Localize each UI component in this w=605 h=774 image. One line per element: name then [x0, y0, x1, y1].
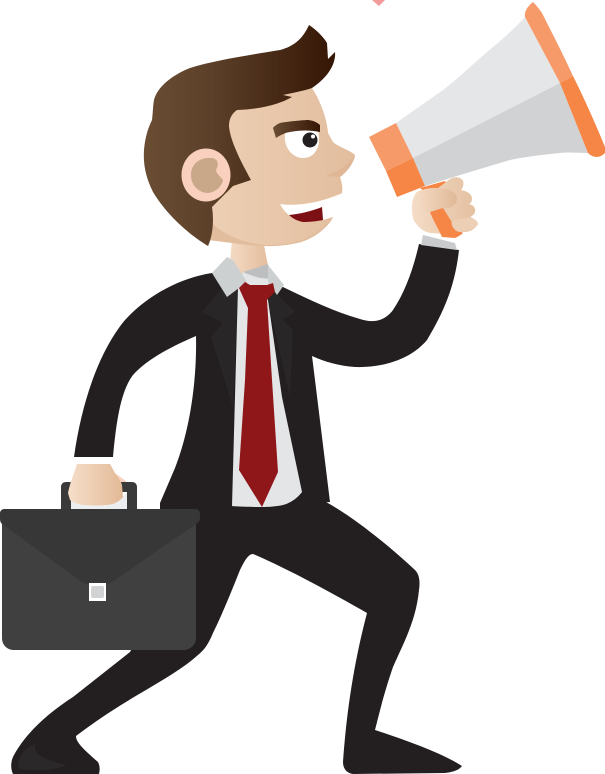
left lapel: [202, 288, 238, 407]
hair: [144, 25, 335, 246]
pupil: [302, 132, 318, 148]
tongue: [289, 207, 323, 222]
rim lower: [560, 76, 605, 157]
jacket: [74, 244, 459, 512]
back ring upper: [369, 123, 413, 171]
mouth: [280, 193, 342, 222]
rim upper: [525, 2, 573, 83]
small pink shape at top edge: [372, 0, 385, 6]
eye: [285, 128, 319, 158]
briefcase with hand: [0, 464, 200, 650]
right collar: [268, 265, 284, 295]
case clasp: [89, 583, 106, 601]
chin shadow: [208, 217, 333, 246]
handle top: [420, 181, 450, 196]
handle paper strip: [71, 492, 127, 510]
megaphone: [369, 2, 605, 197]
handle: [430, 208, 463, 238]
right lapel: [268, 293, 295, 397]
tie: [239, 282, 278, 507]
hand holding megaphone: [412, 177, 478, 250]
left collar: [212, 257, 247, 297]
legs and trousers: [11, 502, 462, 774]
eyebrow: [273, 120, 320, 138]
neck: [230, 240, 268, 281]
nose shadow: [325, 155, 355, 177]
shirt: [212, 257, 302, 507]
shirt front: [232, 272, 302, 507]
face: [205, 88, 355, 246]
horn lower: [413, 83, 588, 186]
case flap: [0, 509, 200, 585]
left shoe highlight: [18, 744, 66, 770]
lower finger: [452, 218, 478, 232]
clasp centre: [91, 586, 104, 598]
left cuff shadow: [115, 473, 127, 482]
jacket body and sleeves: [74, 244, 459, 512]
eye highlight: [311, 134, 315, 138]
palm and fingers: [412, 177, 478, 234]
case body: [2, 515, 196, 650]
back ring lower: [386, 158, 425, 197]
shirt collar shadow: [243, 264, 272, 288]
inner ear: [191, 158, 223, 193]
horn upper: [396, 17, 560, 158]
ear: [182, 148, 230, 202]
left hand: [68, 464, 123, 505]
thumb: [417, 188, 457, 213]
head: [144, 25, 355, 246]
case handle: [61, 482, 137, 510]
right cuff: [421, 235, 457, 250]
